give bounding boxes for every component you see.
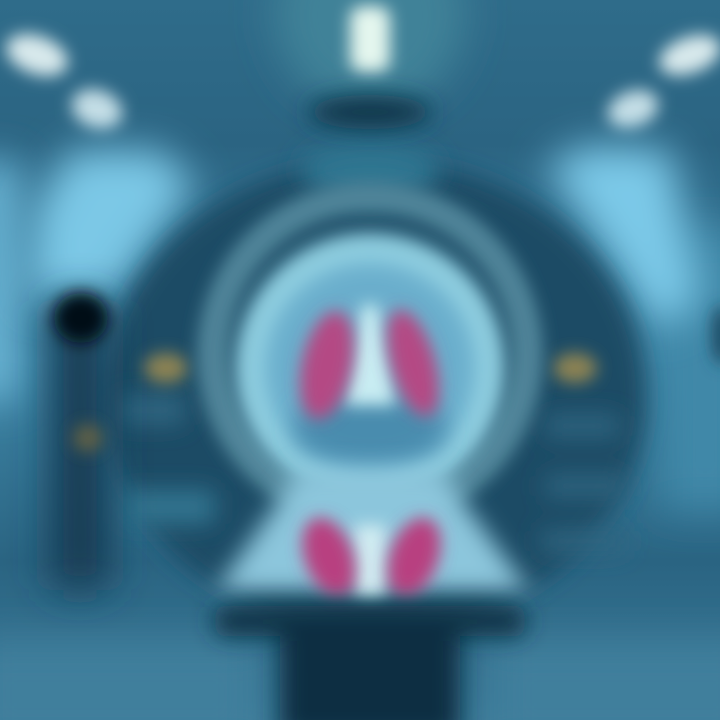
side column with black sensor [50,293,110,590]
glow: left wall [30,150,195,300]
glow: right wall [545,145,700,330]
scanner body [103,95,647,630]
amber indicator: left [144,353,188,383]
right edge dark accent [712,305,720,365]
ceiling lights: left [0,26,128,136]
scanner outer ring [212,197,528,513]
patient table cone [215,470,530,592]
ceiling lights: right [602,27,720,135]
amber indicator: right [553,353,597,383]
bore centre: light spine [344,305,396,405]
bore centre: lower dome [294,390,446,466]
ceiling light fixture: centre [275,0,465,110]
scanner inner ring and bore [242,240,498,496]
lower lungs [292,510,451,604]
upper lungs [291,304,449,424]
cone centre highlight [354,525,386,597]
scanner pedestal [215,606,525,720]
